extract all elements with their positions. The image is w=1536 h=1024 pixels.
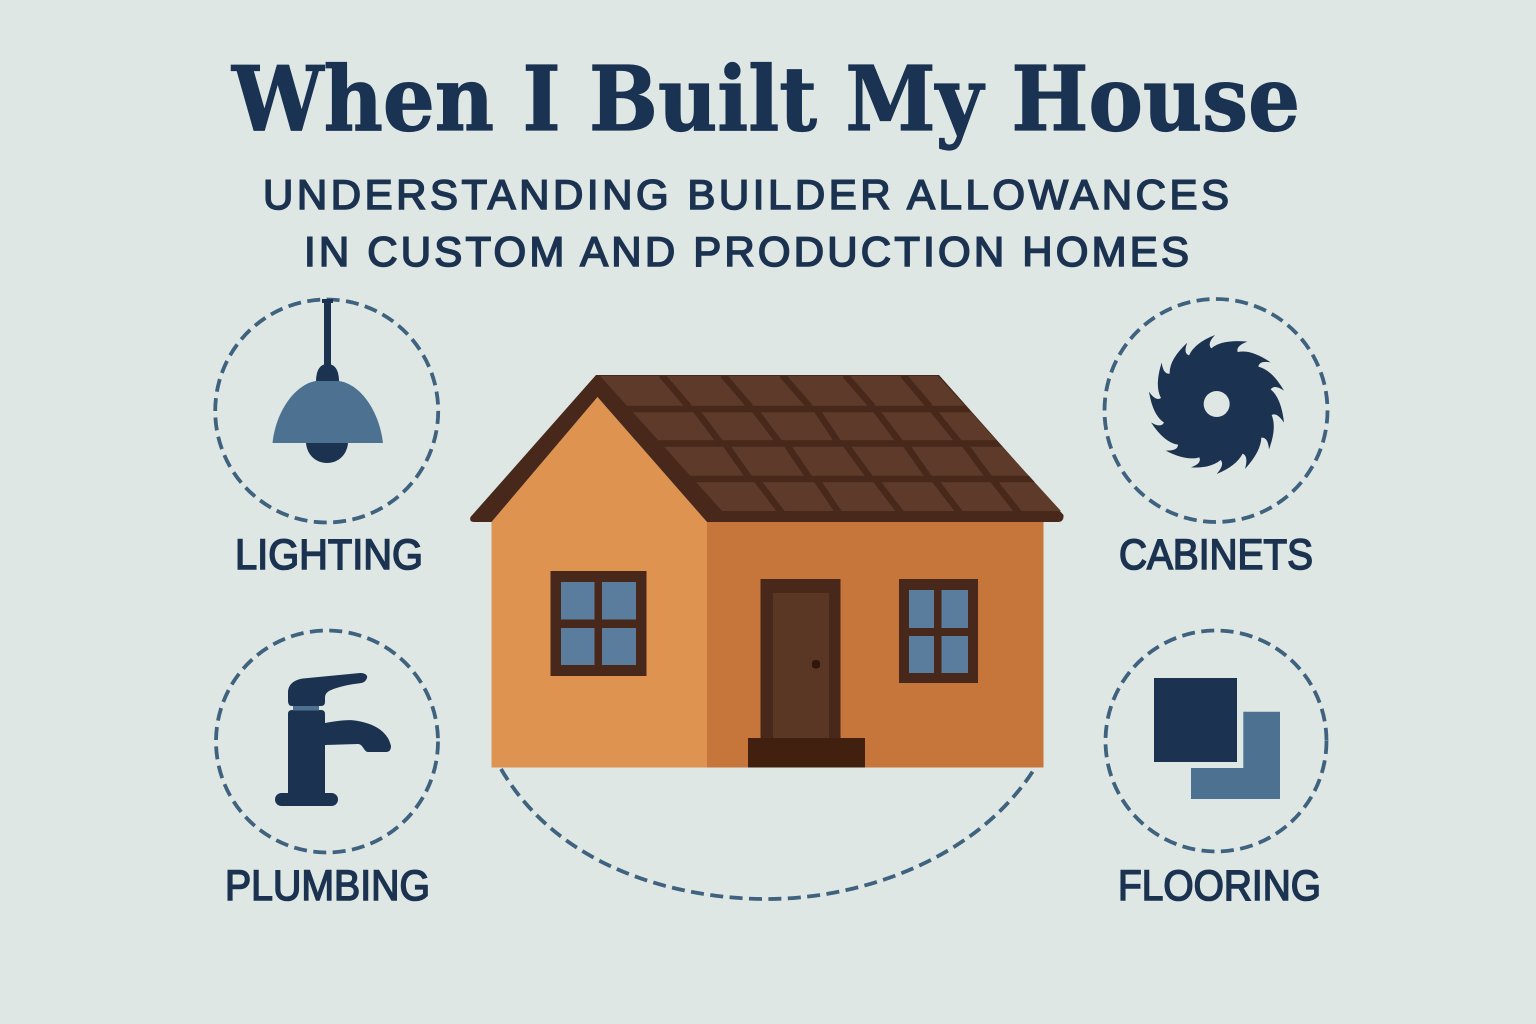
front step	[748, 738, 865, 768]
label: flooring: FLOORING	[1118, 862, 1321, 910]
icon: saw blade	[1149, 335, 1284, 474]
dashed circle: plumbing	[216, 630, 438, 852]
right front wall	[707, 518, 1044, 768]
shingles	[600, 375, 1061, 513]
dashed circle: lighting	[215, 300, 438, 522]
panel: lighting	[215, 299, 438, 579]
label: lighting: LIGHTING	[235, 531, 423, 579]
dashed arc under house	[501, 769, 1033, 899]
title: When I Built My House	[231, 46, 1300, 151]
subtitle	[263, 171, 1229, 275]
left window	[550, 571, 646, 676]
roof	[470, 375, 1064, 522]
infographic canvas	[213, 62, 1330, 902]
dashed circle: cabinets	[1104, 299, 1328, 522]
label: plumbing: PLUMBING	[225, 862, 430, 910]
subtitle: IN CUSTOM AND PRODUCTION HOMES	[304, 228, 1189, 275]
left gable wall	[492, 397, 707, 768]
house illustration	[470, 375, 1064, 768]
right window	[899, 579, 978, 683]
panel: plumbing	[216, 630, 438, 910]
subtitle: UNDERSTANDING BUILDER ALLOWANCES	[263, 171, 1229, 218]
dashed circle: flooring	[1106, 630, 1326, 852]
label: cabinets: CABINETS	[1119, 531, 1313, 579]
icon: faucet	[275, 673, 391, 806]
door	[760, 579, 840, 739]
panel: flooring	[1106, 630, 1326, 910]
icon: floor tiles	[1154, 678, 1280, 799]
icon: pendant lamp	[272, 299, 383, 463]
panel: cabinets	[1104, 299, 1328, 579]
